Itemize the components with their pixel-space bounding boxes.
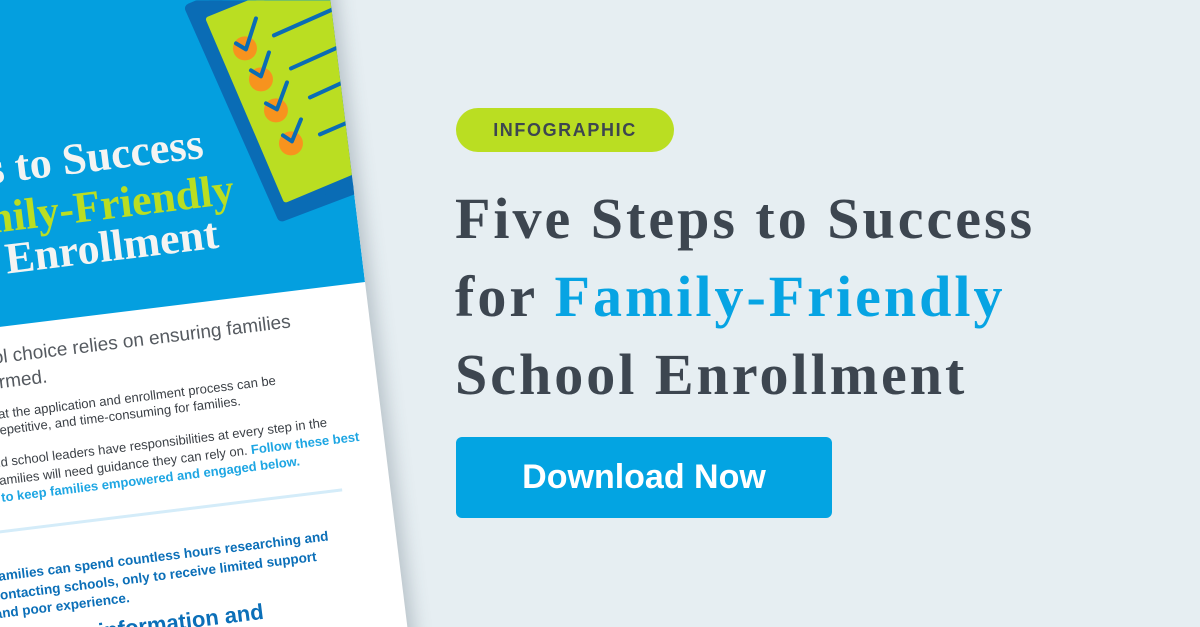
tilted infographic document preview [0,0,426,627]
step 1 problem text [0,528,329,622]
intro body paragraph [0,373,360,512]
tag: infographic pill [456,108,674,152]
step 1 problem text: contacting schools, only to receive limited support [0,549,317,604]
main title [455,186,1035,407]
main title: School Enrollment [455,342,967,407]
tag: infographic pill: INFOGRAPHIC [493,120,637,140]
divider [0,488,342,542]
intro lead text [0,311,292,401]
main title: Five Steps to Success [455,186,1035,251]
main title: for Family-Friendly [455,264,1005,329]
button: download now: Download Now [522,458,766,496]
panel: blue header [0,0,365,379]
button: download now [456,437,832,518]
